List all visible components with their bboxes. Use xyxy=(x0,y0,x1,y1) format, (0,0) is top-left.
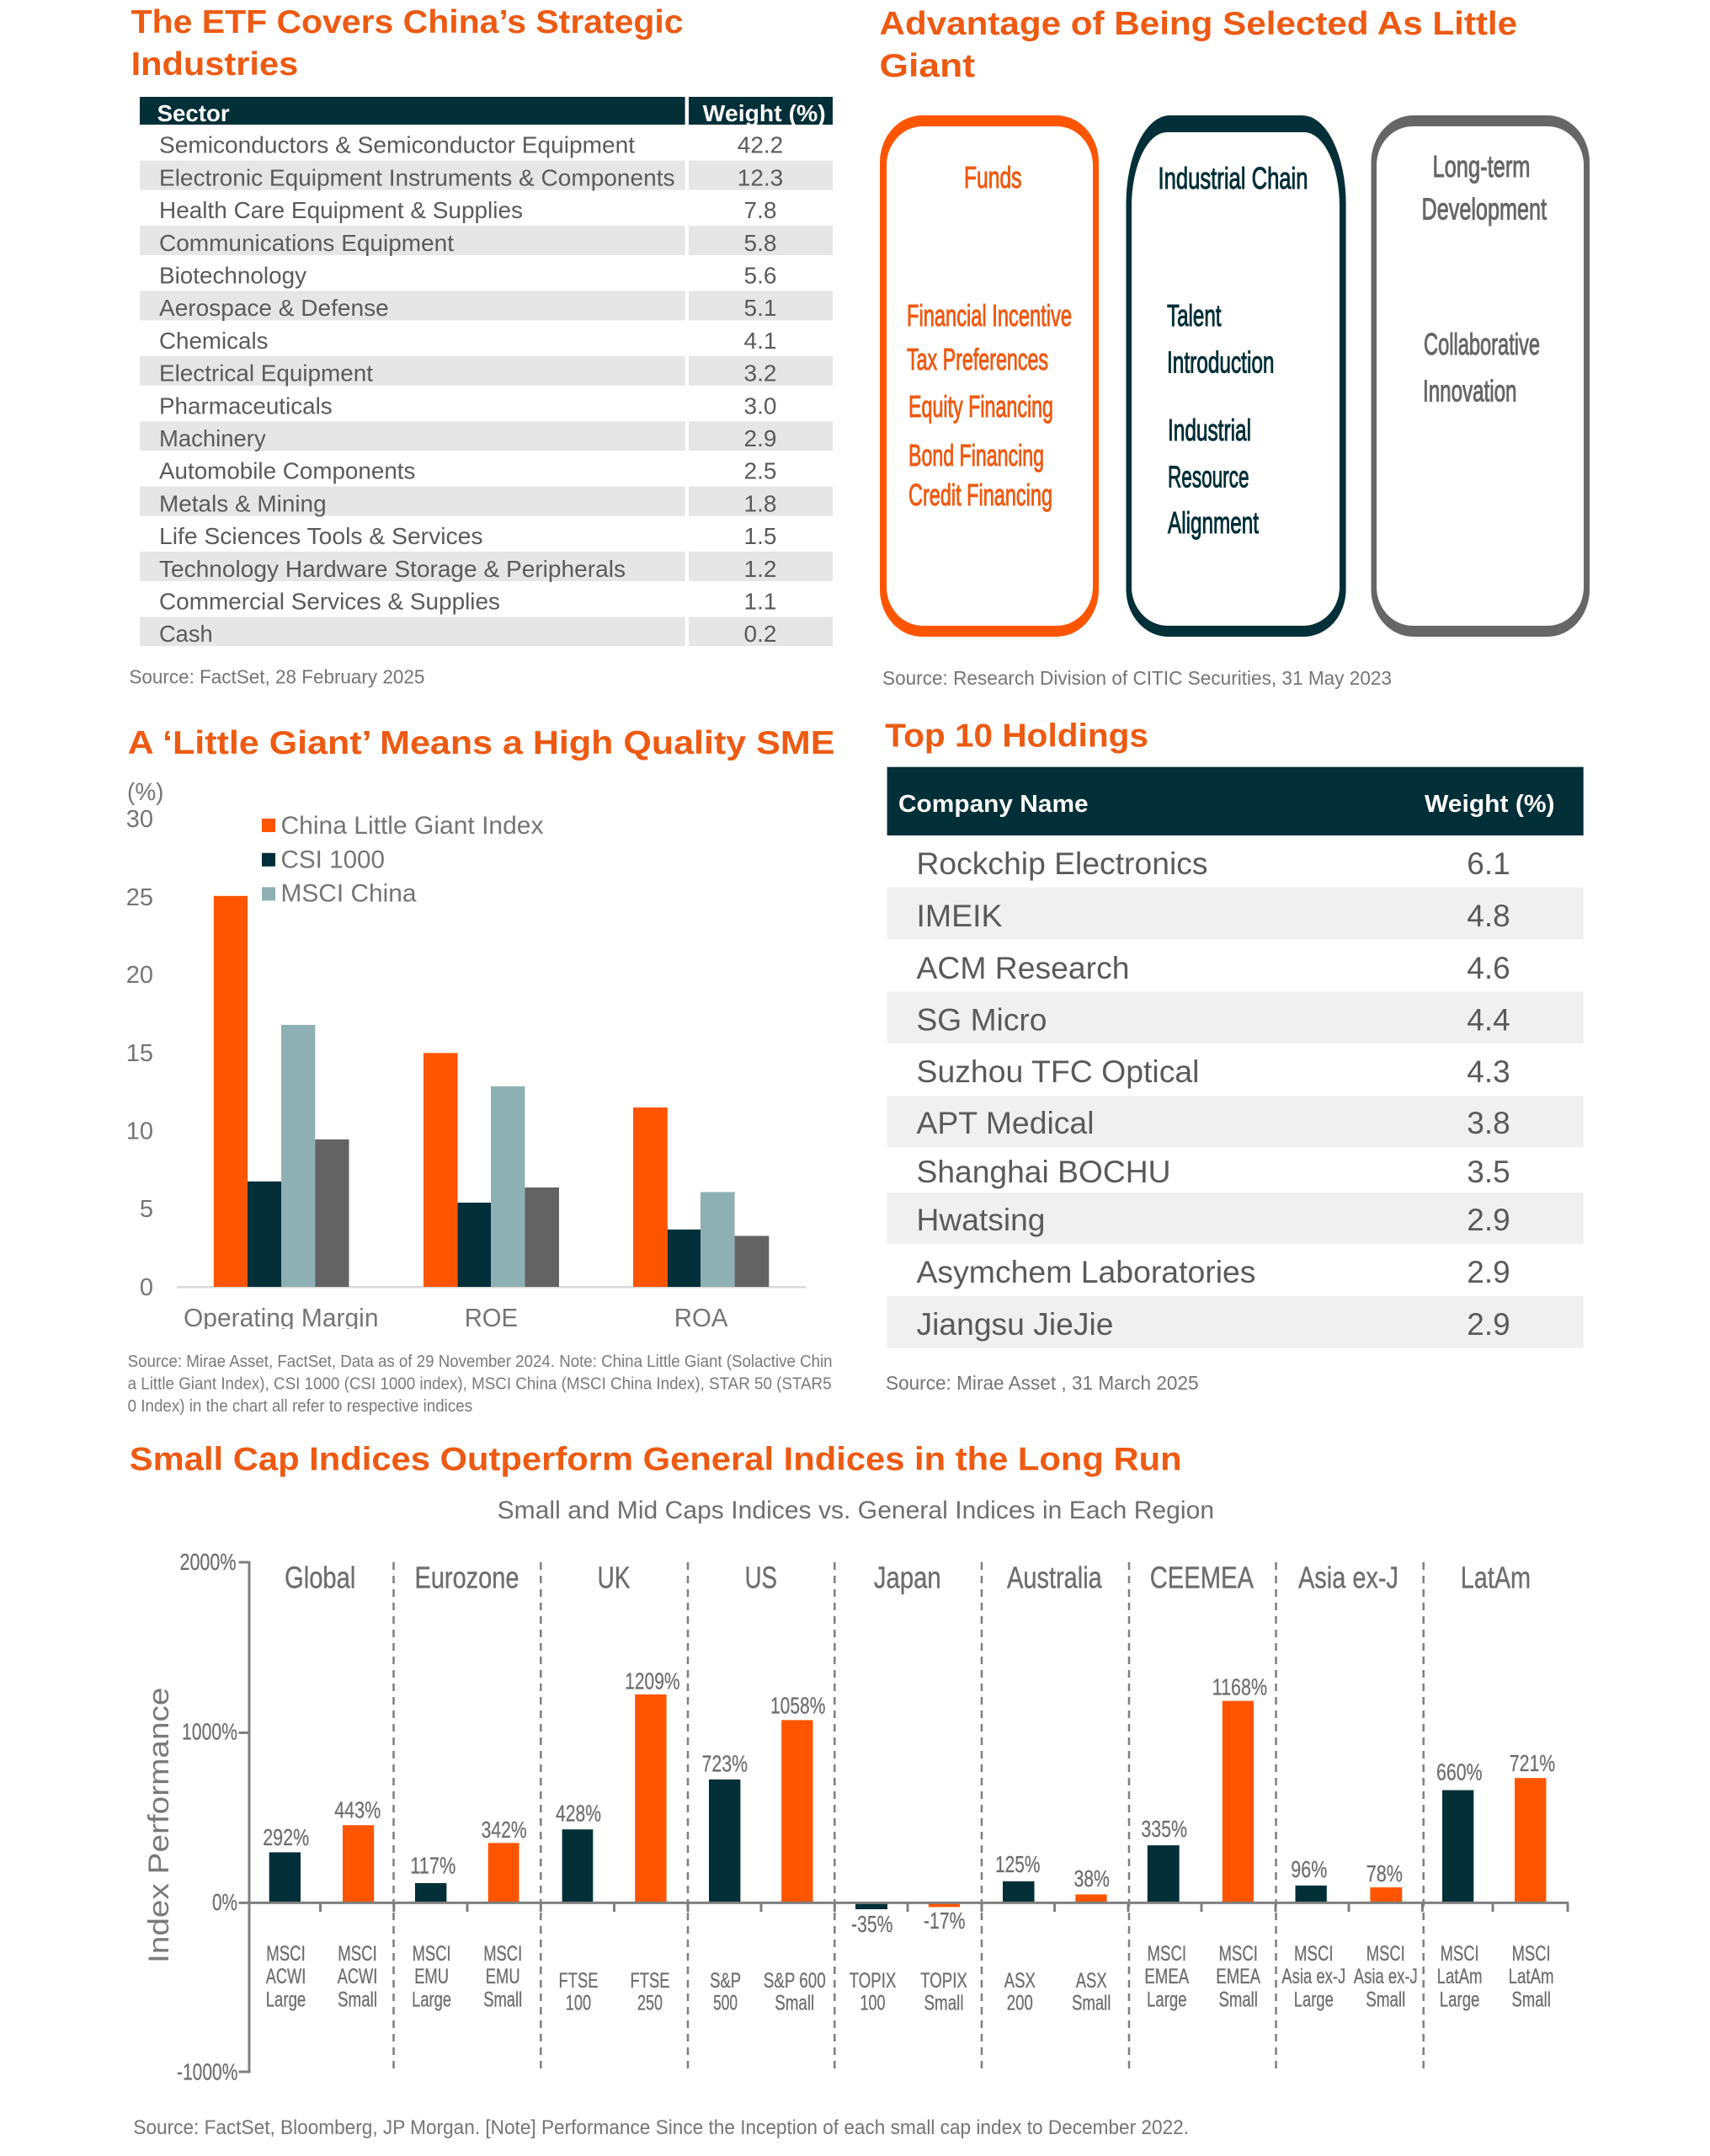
panel: Funds box: Bond Financing xyxy=(908,438,1044,472)
index category labels: ASX xyxy=(1004,1969,1036,1993)
panel: Industrial Chain box: Industrial Chain xyxy=(1159,161,1308,195)
table sector names: Chemicals xyxy=(159,328,268,354)
bars: large cap xyxy=(269,1780,1473,1909)
index category labels: Asia ex-J xyxy=(1281,1965,1345,1988)
region headers: CEEMEA xyxy=(1150,1560,1254,1594)
table header: Sector xyxy=(157,100,230,126)
legend: CSI 1000 xyxy=(281,846,385,874)
index category labels: LatAm xyxy=(1437,1965,1483,1988)
title: Small Cap Indices Outperform: Small Cap Indices Outperform General Indices in the Long Run xyxy=(130,1442,1182,1477)
holdings weights xyxy=(1467,846,1510,1342)
panel: Industrial Chain box xyxy=(1127,115,1346,637)
source: regional chart: Source: FactSet, Bloomberg, JP Morgan. [Note] Performance Since the Inception of each small cap index to December 2022. xyxy=(133,2116,1189,2139)
value labels: -35% xyxy=(851,1911,892,1937)
index category labels: Small xyxy=(1218,1988,1258,2011)
value labels: 1209% xyxy=(625,1668,680,1694)
table weights: 1.2 xyxy=(744,556,776,582)
bars: small cap xyxy=(343,1694,1546,1907)
bar chart: quality metrics xyxy=(126,779,806,1339)
panel: Long-term Development box xyxy=(1371,115,1590,637)
value labels: 335% xyxy=(1141,1816,1187,1842)
category labels: ROA xyxy=(674,1303,728,1332)
index category labels: 100 xyxy=(566,1991,591,2015)
index category labels: ACWI xyxy=(338,1965,377,1988)
index category labels: 250 xyxy=(637,1991,663,2015)
table sector names: Commercial Services & Supplies xyxy=(159,588,500,615)
value labels: 78% xyxy=(1366,1860,1403,1886)
table sector names: Life Sciences Tools & Services xyxy=(159,523,483,549)
panel: Long-term Development box: Innovation xyxy=(1423,374,1517,408)
index category labels: Small xyxy=(1511,1988,1551,2011)
index category labels: Large xyxy=(266,1988,306,2011)
y axis labels xyxy=(126,779,163,1301)
index category labels: MSCI xyxy=(483,1942,522,1966)
holdings names xyxy=(916,846,1256,1342)
region headers: US xyxy=(745,1560,777,1594)
panel: Long-term Development box: Long-term xyxy=(1433,149,1531,184)
index category labels: EMEA xyxy=(1144,1965,1189,1988)
holdings weights: 2.9 xyxy=(1467,1307,1510,1342)
table weights: 4.1 xyxy=(744,328,776,354)
title: The ETF Covers China's Strategic Industries: The ETF Covers China’s Strategic xyxy=(131,4,684,40)
index category labels: Large xyxy=(412,1988,451,2011)
holdings names: APT Medical xyxy=(916,1106,1095,1140)
y axis labels: 0 xyxy=(140,1274,153,1301)
source: sector table: Source: FactSet, 28 February 2025 xyxy=(129,666,424,688)
region headers: Eurozone xyxy=(414,1560,519,1594)
index category labels: Large xyxy=(1294,1988,1334,2011)
index category labels: MSCI xyxy=(413,1942,451,1966)
panel: Industrial Chain box: Industrial xyxy=(1168,413,1251,447)
value labels: 342% xyxy=(482,1817,527,1843)
panel: Funds box xyxy=(880,115,1099,637)
holdings weights: 4.4 xyxy=(1467,1002,1510,1038)
index category labels: Small xyxy=(483,1988,522,2011)
source note: quality chart xyxy=(128,1353,833,1416)
legend: MSCI China xyxy=(281,879,417,908)
index category labels: MSCI xyxy=(1366,1942,1405,1966)
index category labels: MSCI xyxy=(1512,1942,1551,1966)
index category labels: MSCI xyxy=(1441,1942,1479,1966)
value labels: 721% xyxy=(1510,1750,1555,1776)
index category labels: TOPIX xyxy=(920,1969,967,1993)
title: A Little Giant Means a High Quality SME: A ‘Little Giant’ Means a High Quality SME xyxy=(128,725,834,761)
panel: Industrial Chain box: Introduction xyxy=(1167,345,1275,379)
value labels: 292% xyxy=(263,1824,309,1850)
holdings weights: 3.5 xyxy=(1467,1155,1510,1189)
table row stripes xyxy=(140,161,833,646)
bar chart: regional index performance xyxy=(143,1549,1569,2085)
region headers xyxy=(285,1560,1531,1594)
y axis labels: 30 xyxy=(126,806,153,833)
panel: Funds box: Tax Preferences xyxy=(907,342,1048,376)
panel: top 10 holdings table xyxy=(887,767,1584,1348)
title: The ETF Covers China's Strategic Industries: Industries xyxy=(131,46,298,83)
panel: Long-term Development box: Development xyxy=(1421,192,1547,226)
holdings weights: 2.9 xyxy=(1467,1255,1510,1289)
table weights: 3.0 xyxy=(744,392,776,419)
source: advantages: Source: Research Division of CITIC Securities, 31 May 2023 xyxy=(882,667,1392,689)
holdings weights: 3.8 xyxy=(1467,1106,1510,1140)
panel: Funds box: Credit Financing xyxy=(908,478,1052,512)
table sector names: Cash xyxy=(159,621,213,647)
holdings names: IMEIK xyxy=(916,899,1003,933)
holdings header: Weight (%) xyxy=(1425,791,1554,818)
index category labels: Asia ex-J xyxy=(1354,1965,1418,1988)
holdings row stripes xyxy=(887,888,1584,1348)
title: Advantage of Being Selected As Little Giant: Advantage of Being Selected As Little xyxy=(879,6,1517,42)
index category labels: Small xyxy=(1072,1991,1111,2015)
table sector names: Aerospace & Defense xyxy=(159,295,389,321)
y axis labels: 15 xyxy=(126,1040,153,1067)
holdings names: SG Micro xyxy=(916,1002,1047,1038)
value labels: 38% xyxy=(1073,1865,1110,1892)
index category labels: ACWI xyxy=(266,1965,306,1988)
index category labels: Large xyxy=(1440,1988,1479,2011)
index category labels: EMEA xyxy=(1216,1965,1260,1988)
index category labels: Small xyxy=(338,1988,377,2011)
legend: China Little Giant Index xyxy=(281,812,544,840)
panel: Funds box: Financial Incentive xyxy=(907,298,1072,333)
region headers: Asia ex-J xyxy=(1298,1560,1398,1594)
y axis title: Index Performance xyxy=(143,1688,175,1963)
bars: ROE xyxy=(424,1053,559,1287)
index category labels: 200 xyxy=(1007,1991,1033,2015)
y axis: 1000% xyxy=(182,1719,237,1745)
index category labels: FTSE xyxy=(630,1969,670,1993)
table sector names: Metals & Mining xyxy=(159,490,327,516)
value labels: 125% xyxy=(995,1851,1040,1877)
region headers: Japan xyxy=(874,1560,941,1594)
panel: Funds box: Equity Financing xyxy=(908,389,1053,424)
table weights: 0.2 xyxy=(744,621,776,647)
holdings weights: 4.8 xyxy=(1467,899,1510,933)
index category labels: FTSE xyxy=(559,1969,598,1993)
value labels: 1168% xyxy=(1212,1674,1267,1700)
index category labels: MSCI xyxy=(266,1942,306,1966)
value labels: 428% xyxy=(556,1800,601,1826)
zero axis with ticks xyxy=(249,1903,1569,1912)
index category labels: ASX xyxy=(1076,1969,1107,1993)
index category labels: 100 xyxy=(860,1991,886,2015)
category labels: Operating Margin xyxy=(184,1303,379,1332)
value labels: 660% xyxy=(1436,1758,1483,1785)
index category labels: Small xyxy=(924,1991,963,2015)
table sector names: Semiconductors & Semiconductor Equipment xyxy=(159,132,635,158)
index category labels: MSCI xyxy=(1148,1942,1186,1966)
y axis: 0% xyxy=(212,1889,237,1915)
holdings weights: 4.6 xyxy=(1467,951,1510,985)
title: The ETF Covers China's Strategic Industries xyxy=(131,4,684,83)
table weights: 5.6 xyxy=(744,263,776,288)
panel: Funds box: Funds xyxy=(964,160,1022,195)
value labels xyxy=(263,1668,1555,1937)
holdings names: Hwatsing xyxy=(916,1203,1046,1237)
region separators xyxy=(394,1562,1424,2072)
source: holdings: Source: Mirae Asset , 31 March 2025 xyxy=(886,1372,1199,1394)
table sector names xyxy=(159,132,675,647)
table weights: 1.1 xyxy=(744,588,776,615)
table sector names: Electronic Equipment Instruments & Components xyxy=(159,164,675,190)
y axis: 2000% xyxy=(180,1549,236,1575)
holdings names: Jiangsu JieJie xyxy=(916,1307,1113,1342)
table weights: 1.8 xyxy=(744,490,776,516)
y axis labels: 25 xyxy=(126,884,153,911)
table sector names: Pharmaceuticals xyxy=(159,392,333,419)
table weights: 1.5 xyxy=(744,523,776,549)
holdings names: Shanghai BOCHU xyxy=(916,1155,1170,1189)
title: Top 10 Holdings: Top 10 Holdings xyxy=(885,718,1148,755)
index category labels: MSCI xyxy=(338,1942,377,1966)
value labels: 443% xyxy=(334,1797,381,1822)
holdings header xyxy=(887,767,1584,835)
table weights: 7.8 xyxy=(744,197,776,223)
holdings names: ACM Research xyxy=(916,951,1130,985)
holdings names: Asymchem Laboratories xyxy=(916,1255,1256,1289)
panel: sector weight table xyxy=(140,97,833,647)
value labels: -17% xyxy=(924,1908,965,1934)
index category labels: TOPIX xyxy=(850,1969,897,1993)
category labels: ROE xyxy=(465,1303,518,1332)
index category labels: Large xyxy=(1147,1988,1187,2011)
chart subtitle: Small and Mid Caps Indices vs. General Indices in Each Region xyxy=(498,1497,1214,1524)
holdings names: Suzhou TFC Optical xyxy=(916,1054,1199,1089)
bars: Operating Margin xyxy=(214,896,349,1287)
holdings names: Rockchip Electronics xyxy=(916,846,1207,881)
table header: Weight (%) xyxy=(703,100,826,126)
table sector names: Communications Equipment xyxy=(159,230,454,256)
table sector names: Automobile Components xyxy=(159,458,415,484)
table sector names: Health Care Equipment & Supplies xyxy=(159,197,523,223)
index category labels: MSCI xyxy=(1218,1942,1258,1966)
table weights xyxy=(738,132,783,647)
panel: Industrial Chain box: Alignment xyxy=(1168,505,1259,540)
holdings weights: 2.9 xyxy=(1467,1203,1510,1237)
table sector names: Electrical Equipment xyxy=(159,360,373,387)
value labels: 117% xyxy=(410,1853,455,1878)
table header xyxy=(140,97,833,126)
legend xyxy=(262,812,544,908)
title: Advantage of Being Selected As Little Giant xyxy=(879,6,1517,84)
y axis labels: 20 xyxy=(126,962,153,989)
region headers: LatAm xyxy=(1461,1560,1531,1594)
y axis labels: 5 xyxy=(140,1196,153,1223)
table weights: 3.2 xyxy=(744,360,776,387)
source note: quality chart: Source: Mirae Asset, FactSet, Data as of 29 November 2024. Note: China Little Giant (Solactive Chin xyxy=(128,1353,833,1371)
table weights: 2.5 xyxy=(744,458,776,484)
y axis: -1000% xyxy=(177,2059,237,2085)
panel: Industrial Chain box: Resource xyxy=(1168,460,1249,494)
y axis labels: (%) xyxy=(127,779,163,806)
table sector names: Machinery xyxy=(159,425,266,451)
y axis xyxy=(177,1549,249,2085)
panel: Industrial Chain box: Talent xyxy=(1167,298,1221,333)
table weights: 5.1 xyxy=(744,295,776,321)
source note: quality chart: 0 Index) in the chart all refer to respective indices xyxy=(128,1397,472,1416)
table sector names: Biotechnology xyxy=(159,263,306,288)
table sector names: Technology Hardware Storage & Peripherals xyxy=(159,556,626,582)
y axis labels: 10 xyxy=(126,1118,153,1145)
index category labels: LatAm xyxy=(1509,1965,1554,1988)
source note: quality chart: a Little Giant Index), CSI 1000 (CSI 1000 index), MSCI China (MSCI China Index), STAR 50 (STAR5 xyxy=(128,1375,832,1394)
table weights: 5.8 xyxy=(744,230,776,256)
index category labels: EMU xyxy=(414,1965,449,1988)
holdings weights: 6.1 xyxy=(1467,846,1510,881)
holdings weights: 4.3 xyxy=(1467,1054,1510,1089)
index category labels: MSCI xyxy=(1294,1942,1334,1966)
holdings header: Company Name xyxy=(898,791,1089,818)
value labels: 1058% xyxy=(770,1693,825,1719)
table weights: 42.2 xyxy=(738,132,783,158)
index category labels xyxy=(266,1942,1554,2015)
index category labels: Small xyxy=(775,1991,814,2015)
region headers: Global xyxy=(285,1560,355,1594)
value labels: 96% xyxy=(1291,1856,1327,1882)
region headers: UK xyxy=(598,1560,630,1594)
category labels xyxy=(177,1303,728,1339)
index category labels: S&P 600 xyxy=(764,1969,826,1993)
value labels: 723% xyxy=(702,1750,748,1777)
table weights: 2.9 xyxy=(744,425,776,451)
index category labels: EMU xyxy=(486,1965,520,1988)
title: Advantage of Being Selected As Little Giant: Giant xyxy=(879,48,975,84)
index category labels: S&P xyxy=(710,1969,741,1993)
index category labels: 500 xyxy=(713,1991,738,2015)
region headers: Australia xyxy=(1007,1560,1103,1594)
index category labels: Small xyxy=(1366,1988,1405,2011)
table weights: 12.3 xyxy=(738,164,783,190)
panel: Long-term Development box: Collaborative xyxy=(1424,327,1540,361)
bars: ROA xyxy=(633,1107,769,1287)
